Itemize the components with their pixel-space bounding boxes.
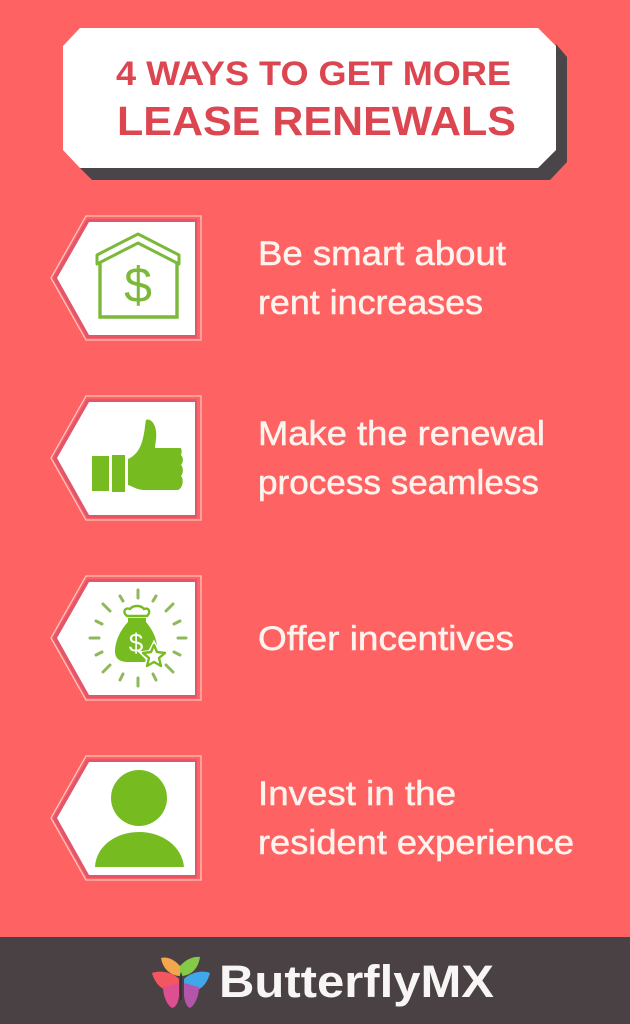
panel: renewal process [51, 396, 545, 520]
tag shape [51, 216, 201, 340]
panel: incentives [51, 576, 514, 700]
text: offer incentives: Offer incentives [258, 620, 514, 658]
logo wordmark: ButterflyMX [219, 956, 494, 1007]
text: be smart [258, 235, 507, 322]
text: make renewal [258, 415, 545, 502]
panel: rent increases [51, 216, 507, 340]
text: invest [258, 775, 574, 862]
icon: house with dollar sign [97, 234, 179, 317]
title banner [63, 28, 567, 180]
title text: LEASE RENEWALS [117, 98, 516, 144]
footer bar [0, 937, 630, 1024]
icon: person [95, 770, 184, 867]
text: invest: resident experience [258, 824, 574, 862]
panel: resident experience [51, 756, 574, 880]
text: make renewal: Make the renewal [258, 415, 545, 453]
icon: money bag with star: $ [129, 628, 144, 658]
tag shape [51, 576, 201, 700]
title text: 4 WAYS TO GET MORE [116, 55, 511, 93]
text: be smart: Be smart about [258, 235, 507, 273]
icon: butterfly logo [152, 957, 210, 1008]
text: make renewal: process seamless [258, 464, 539, 502]
text: be smart: rent increases [258, 284, 483, 322]
title text [116, 55, 516, 144]
tag shape [51, 396, 201, 520]
tag shape [51, 756, 201, 880]
text: invest: Invest in the [258, 775, 456, 813]
icon: thumbs up [92, 420, 183, 492]
icon: money bag with star [90, 590, 186, 686]
icon: house with dollar sign: $ [124, 257, 152, 313]
